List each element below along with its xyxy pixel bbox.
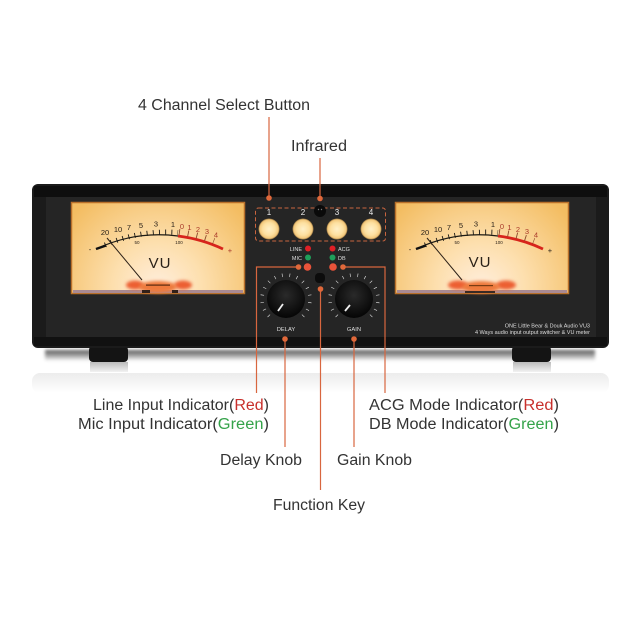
channel buttons: 3	[335, 208, 340, 217]
meter scale numbers: 100	[175, 240, 183, 245]
knob labels: DELAY	[277, 327, 295, 333]
meter scale numbers: 0	[180, 222, 184, 231]
label: mic input indicator: Mic Input Indicator( Green)	[78, 416, 269, 433]
left foot	[89, 346, 128, 362]
label: function key: Function Key	[273, 497, 365, 514]
channel buttons	[258, 208, 382, 240]
meter scale numbers: +	[228, 246, 233, 255]
right meter VU label: VU	[469, 254, 491, 271]
label: line input indicator: Line Input Indicator( Red)	[93, 397, 269, 414]
brand text	[475, 324, 590, 336]
right meter scale and numbers: 5	[459, 221, 463, 230]
meter scale numbers: 50	[134, 240, 140, 245]
channel buttons: 4	[369, 208, 374, 217]
right meter scale and numbers: 100	[495, 240, 503, 245]
meter scale numbers: 1	[187, 223, 192, 232]
meter scale numbers: -	[89, 245, 92, 254]
meter scale numbers: 3	[154, 220, 158, 228]
knob labels	[277, 327, 361, 333]
meter needle	[107, 238, 142, 280]
meter scale numbers: 1	[171, 220, 175, 229]
indicator LEDs and labels: MIC	[292, 256, 302, 262]
function key button	[315, 273, 325, 283]
label: infrared: Infrared	[291, 138, 347, 155]
right meter scale and numbers: 0	[500, 222, 504, 231]
right meter scale and numbers: 2	[516, 225, 520, 234]
right meter needle	[427, 238, 462, 280]
label: DB mode indicator: DB Mode Indicator( Green)	[369, 416, 559, 433]
channel buttons: 1	[267, 208, 272, 217]
right meter glow: lamp and base	[448, 280, 516, 293]
right meter scale and numbers: 7	[447, 223, 451, 232]
panel: left VU meter	[72, 202, 244, 294]
device shadow and reflection	[32, 350, 609, 393]
channel select dashed frame	[256, 208, 386, 241]
right meter scale and numbers: 1	[491, 220, 495, 229]
right meter scale and numbers: 4	[534, 230, 538, 240]
knob labels: GAIN	[347, 327, 361, 333]
meter scale numbers: 10	[114, 225, 122, 234]
meter scale arc and ticks	[96, 232, 223, 249]
meter scale numbers: 2	[196, 225, 200, 234]
brand text: ONE Little Bear & Douk Audio VU3	[505, 324, 590, 330]
meter scale numbers	[89, 220, 233, 255]
label: 4 channel select button: 4 Channel Select Button	[138, 97, 310, 114]
right meter scale and numbers: 50	[454, 240, 460, 245]
right meter scale and numbers: +	[548, 246, 553, 255]
meter scale numbers: 3	[205, 227, 209, 236]
indicator LEDs and labels: LINE	[290, 247, 302, 253]
device body	[32, 184, 609, 348]
meter scale numbers: 4	[214, 230, 218, 240]
meter VU label: VU	[149, 255, 171, 272]
right meter scale and numbers: 1	[507, 223, 512, 232]
gain knob	[320, 265, 388, 333]
indicator LEDs and labels	[290, 246, 350, 271]
delay knob	[252, 265, 320, 333]
right meter scale and numbers: 20	[421, 228, 429, 237]
right meter scale and numbers: 3	[525, 227, 529, 236]
right meter scale and numbers: 3	[474, 220, 478, 228]
label: delay knob: Delay Knob	[220, 452, 302, 469]
indicator LEDs and labels: ACG	[338, 247, 350, 253]
channel buttons: 2	[301, 208, 306, 217]
meter scale numbers: 5	[139, 221, 143, 230]
meter scale numbers: 7	[127, 223, 131, 232]
panel: right VU meter	[396, 202, 568, 294]
right meter scale and numbers: 10	[434, 225, 442, 234]
right meter scale and numbers	[409, 220, 553, 255]
label: ACG mode indicator: ACG Mode Indicator( Red)	[369, 397, 559, 414]
meter scale numbers: 20	[101, 228, 109, 237]
meter glow: lamp and base	[126, 280, 192, 293]
brand text: 4 Ways audio input output switcher & VU meter	[475, 330, 590, 336]
indicator LEDs and labels: DB	[338, 256, 346, 262]
icon: infrared receiver	[314, 205, 326, 217]
leader lines and dots	[256, 117, 385, 490]
right meter scale and numbers: -	[409, 245, 412, 254]
label: gain knob: Gain Knob	[337, 452, 412, 469]
right foot	[512, 346, 551, 362]
